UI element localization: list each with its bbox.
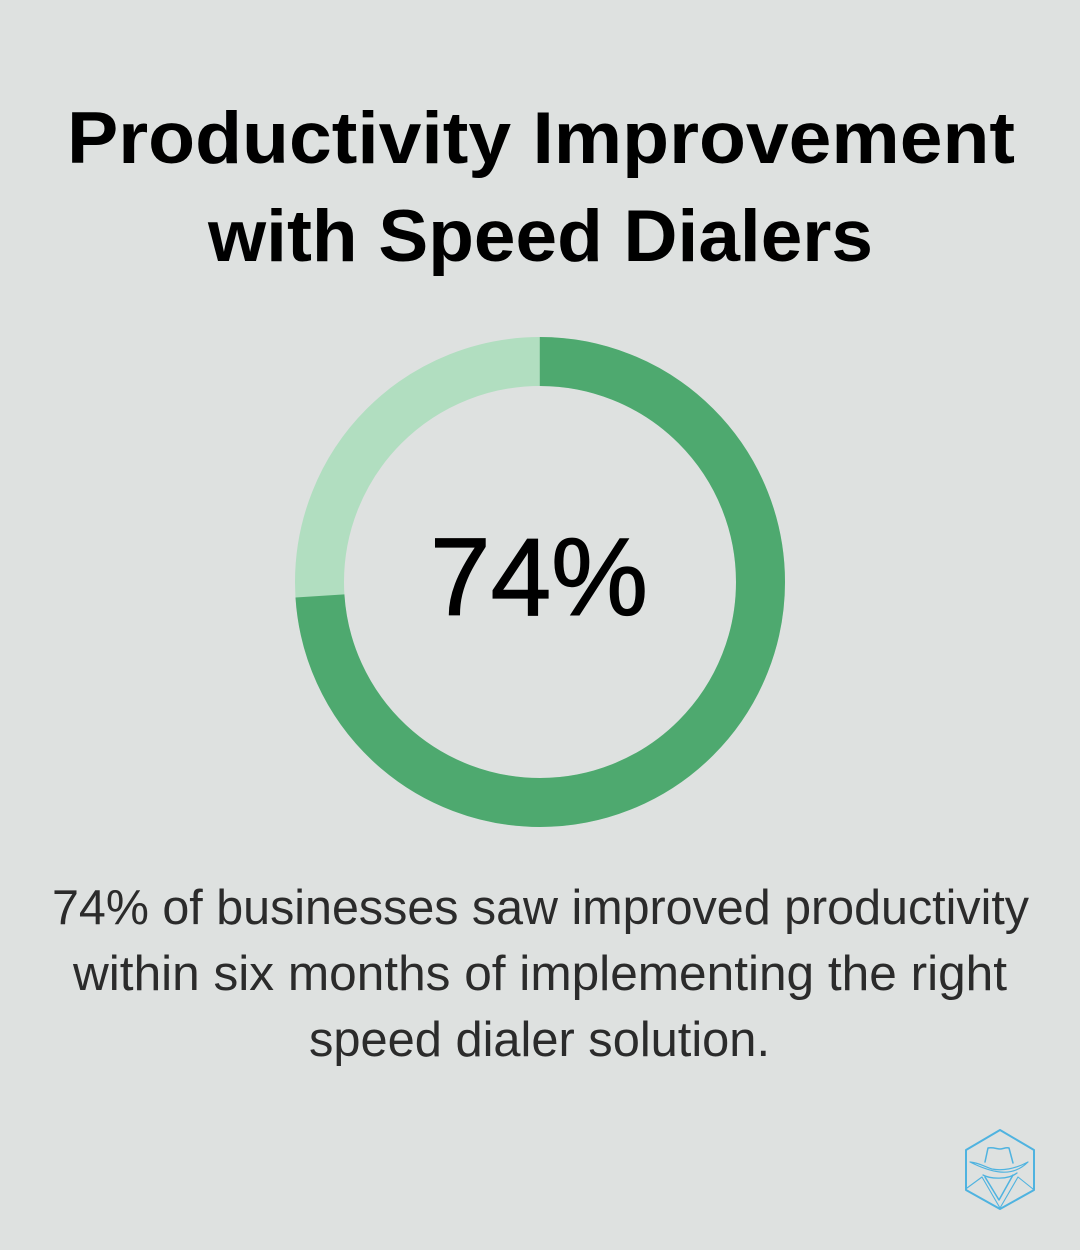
title [67, 98, 1015, 277]
description text: within six months of implementing the right [72, 947, 1007, 1001]
donut centre value: 74% [430, 516, 648, 639]
icon: hat logo [966, 1130, 1034, 1209]
description text: speed dialer solution. [309, 1013, 770, 1067]
title: with Speed Dialers [207, 196, 873, 277]
title: Productivity Improvement [67, 98, 1015, 179]
donut chart: 74% [320, 362, 760, 802]
description text [52, 881, 1029, 1067]
description text: 74% of businesses saw improved productivity [52, 881, 1029, 935]
